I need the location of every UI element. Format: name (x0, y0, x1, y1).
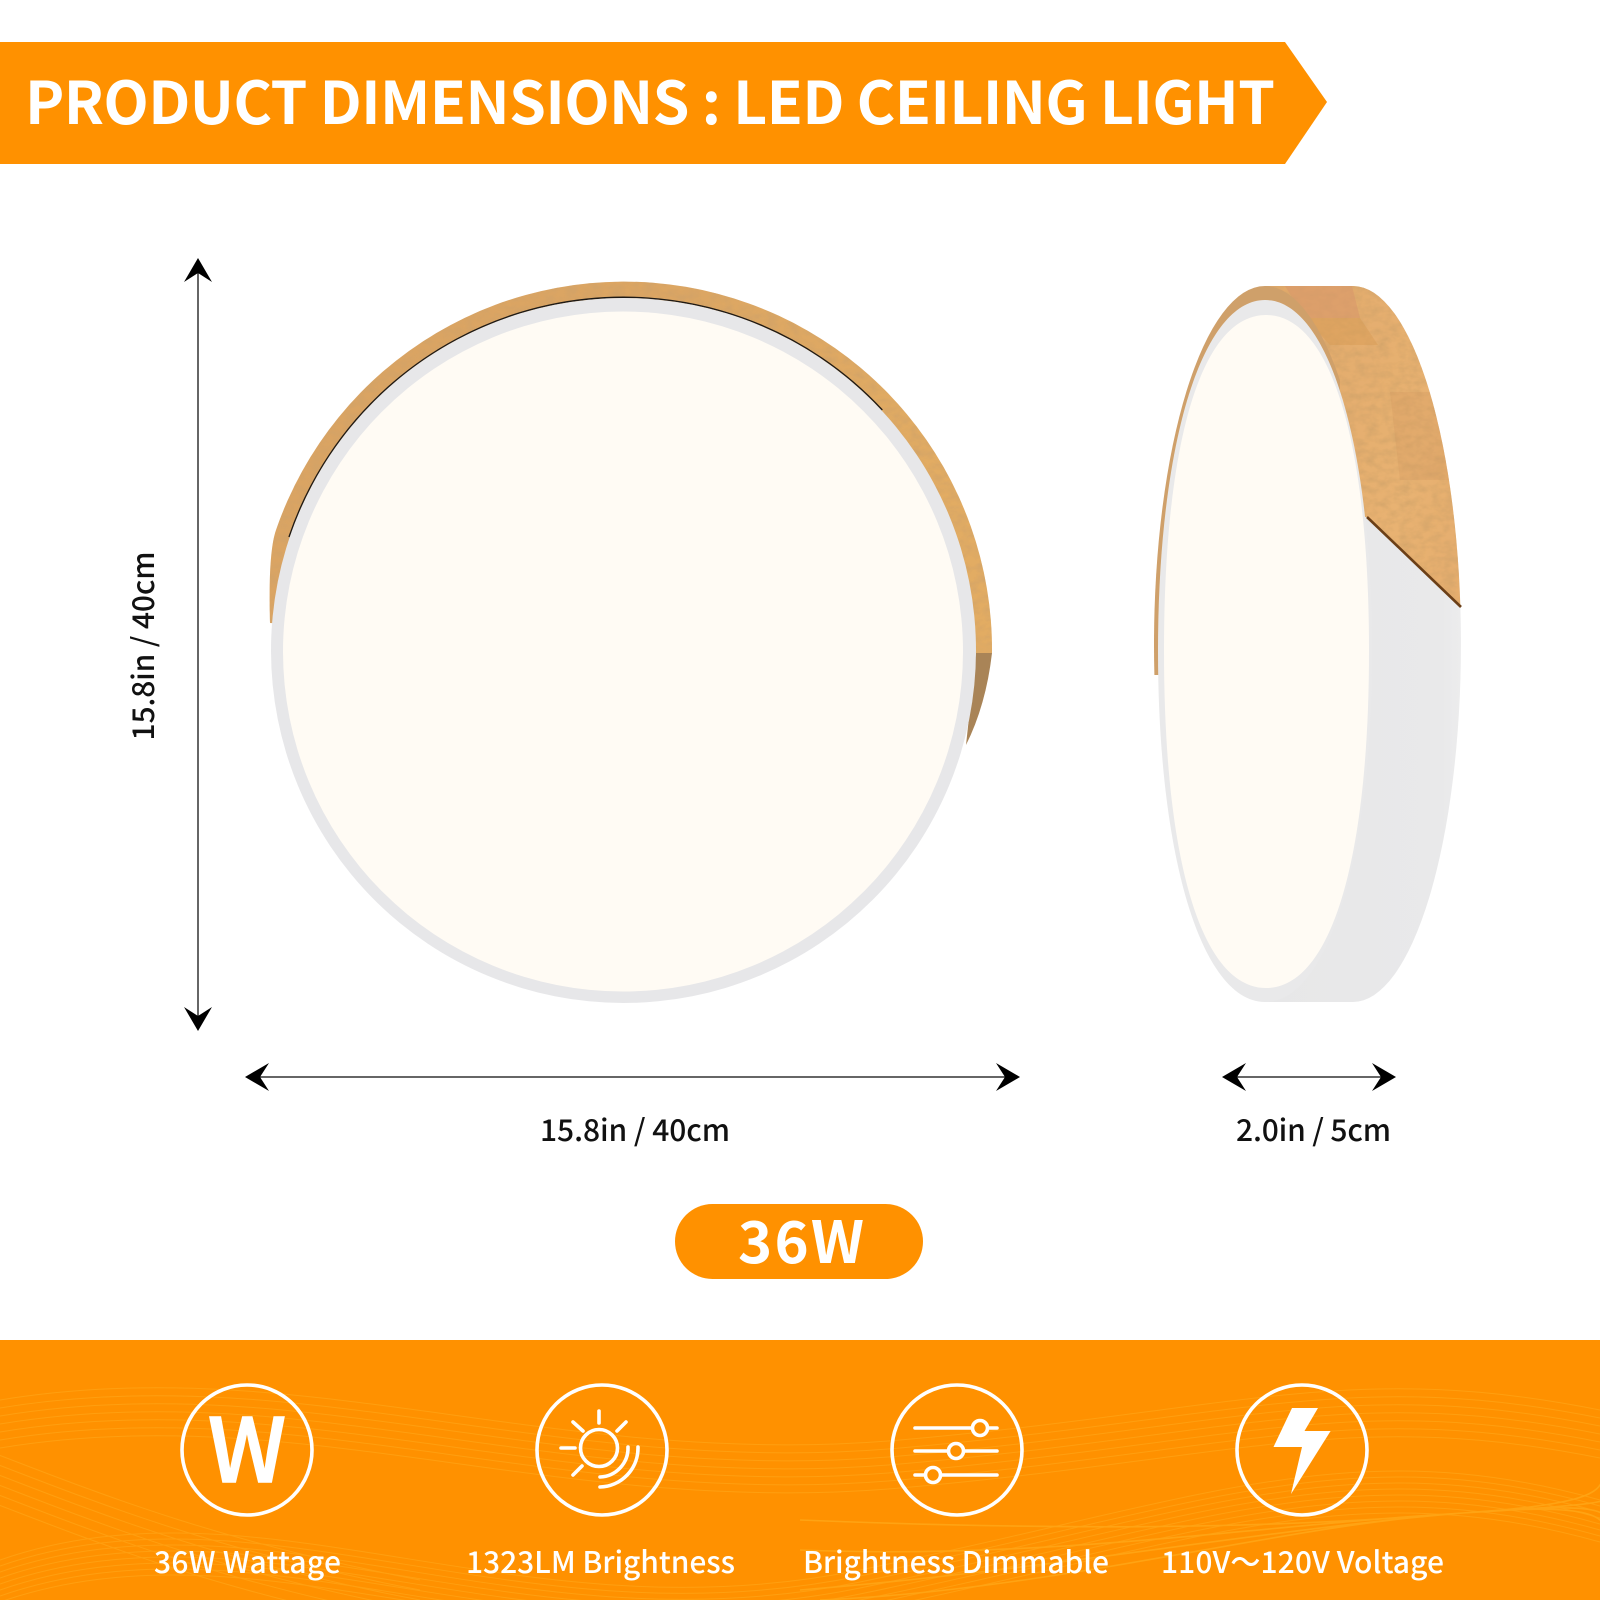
light panel (283, 312, 963, 992)
side view of ceiling light (1154, 286, 1470, 1004)
wood back plate arc (270, 282, 992, 745)
bottom feature band (0, 1340, 1600, 1600)
heading: PRODUCT DIMENSIONS : LED CEILING LIGHT (25, 56, 1275, 141)
front view of ceiling light (270, 282, 992, 1003)
label: brightness: 1323LM Brightness (466, 1538, 735, 1582)
depth dimension arrow (1222, 1063, 1396, 1091)
label: dimmable: Brightness Dimmable (803, 1538, 1109, 1582)
height label: 15.8in / 40cm (119, 552, 163, 740)
label: wattage: 36W Wattage (154, 1538, 341, 1582)
label: voltage: 110V～120V Voltage (1161, 1538, 1444, 1582)
depth label: 2.0in / 5cm (1236, 1106, 1391, 1150)
icon: wattage W: W (208, 1381, 286, 1508)
wattage pill (675, 1196, 923, 1280)
width label: 15.8in / 40cm (540, 1106, 730, 1150)
wattage text: 36W (738, 1196, 864, 1280)
icon: voltage bolt (1237, 1385, 1367, 1515)
height dimension arrow (184, 258, 212, 1031)
side body (1265, 286, 1461, 1002)
icon: wattage W (182, 1381, 312, 1515)
title banner (0, 42, 1327, 164)
white outer ring (271, 298, 976, 1003)
gray rim (1158, 300, 1372, 1002)
wood rim strip (1154, 286, 1340, 675)
icon: brightness sun (537, 1385, 667, 1515)
light panel side (1164, 315, 1369, 988)
wood cut edge (1367, 517, 1461, 607)
wood side section (1266, 286, 1460, 604)
icon: dimmable sliders (892, 1385, 1022, 1515)
width dimension arrow (245, 1063, 1020, 1091)
